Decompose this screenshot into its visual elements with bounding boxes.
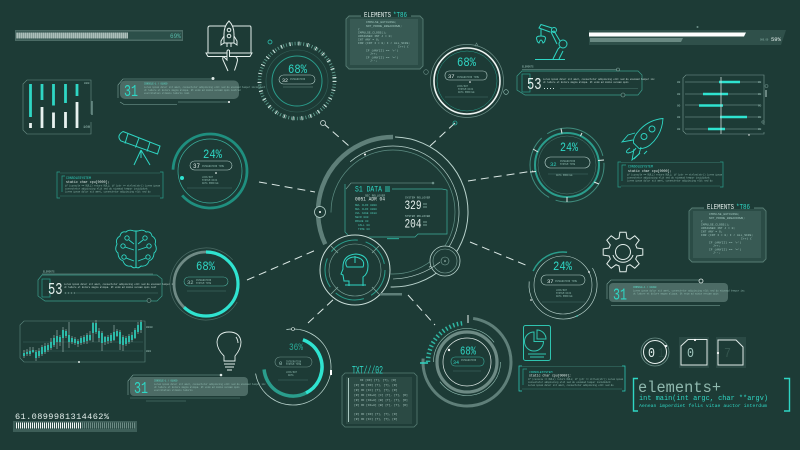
code panel: ELEMENTS top: NOT_PRONE_BREAKDOWN; bbox=[366, 25, 402, 28]
code panel: ELEMENTS right: INT ANY = 0; bbox=[701, 230, 723, 234]
code panel: right bbox=[618, 162, 723, 187]
code panel: ELEMENTS top: ELEMENTS bbox=[364, 12, 391, 20]
stat panel: 31 bottom: 31 bbox=[134, 379, 148, 398]
code panel: left: static char cpu[0000]; bbox=[66, 180, 110, 184]
code panel: ELEMENTS right: I++) { bbox=[741, 236, 752, 240]
code panel: TXT///02: [R] OF [IC] [T], [T], [R] bbox=[354, 388, 398, 392]
hub data panel: 0051 ADR 04 bbox=[355, 196, 386, 202]
hub inner bottom arc bbox=[380, 262, 440, 296]
bar chart panel: left vertical bars: 000 bbox=[84, 82, 90, 85]
progress bar: top right 59%: 000.00 bbox=[760, 38, 769, 42]
progress bar: top right 59%: 59% bbox=[771, 36, 782, 43]
stat panel: 53 right: 53 bbox=[527, 75, 542, 94]
stat panel: 31 bottom: ut labore et dolore magna aliqua. Ut enim ad minim veniam quis bbox=[154, 386, 240, 389]
code panel: TXT///02: [R] OF [IN+0] [B] [T], [T], [R] bbox=[354, 398, 408, 402]
bar chart panel: left vertical bars bbox=[23, 80, 92, 134]
gauge: 24% left: LOCK/OUT bbox=[202, 176, 214, 179]
gauge: 24% left: 37 bbox=[193, 163, 200, 170]
icon: document with pie chart bbox=[524, 326, 550, 360]
code panel: ELEMENTS top: UNSIGNED INT J = 0; bbox=[358, 35, 392, 38]
gauge: 68% left lower: 68% bbox=[196, 259, 215, 274]
gauge: 24% left: INTEGRATION TIME bbox=[202, 165, 225, 168]
counter: round 0: 0 bbox=[648, 347, 655, 362]
counter: square 0 bbox=[679, 337, 709, 368]
gauge: 24% right top: SYSTEM TIME bbox=[560, 163, 576, 166]
code panel: ELEMENTS top: J++; bbox=[370, 52, 377, 56]
code panel: TXT///02 bbox=[342, 366, 417, 427]
hub data panel: ROGUE 00 bbox=[355, 220, 369, 223]
hub data panel: 204 bbox=[404, 218, 422, 232]
gauge: 24% left: 24% bbox=[203, 147, 222, 162]
text block: elements+: elements+ bbox=[638, 379, 721, 397]
stat panel: 53 right bbox=[517, 66, 655, 97]
hub data panel: SYSTEM ROLLOVER bbox=[405, 215, 430, 218]
horizontal bar chart panel: 00 bbox=[677, 93, 681, 96]
text block: elements+: int main(int argc, char **argv) bbox=[639, 395, 768, 403]
hub data panel: 329 bbox=[404, 199, 422, 213]
code panel: bottom right: static char cpu[0000]; bbox=[529, 374, 571, 378]
code panel: bottom right: Lorem ipsum dolor sit amet, consectetur adipiscing elit sed do bbox=[528, 384, 614, 387]
stat panel: 53 left: Lorem ipsum dolor sit amet, consectetur adipiscing elit sed do eiusmod tempor inc bbox=[64, 283, 176, 286]
gauge: 68% bottom center: INTEGRATION bbox=[461, 359, 477, 362]
hub data panel: SEC ROLLOVER bbox=[365, 194, 385, 198]
gauge: 24% right lower: DATA PROFILE bbox=[556, 295, 573, 298]
gauge: 36%: 36% bbox=[289, 343, 303, 354]
gauge: 68% top ticks: 68% bbox=[288, 62, 307, 77]
bar chart panel: left vertical bars: 100 bbox=[83, 126, 91, 130]
gauge: 36% bbox=[249, 323, 337, 411]
code panel: ELEMENTS right: IF (ANY[I] == '+') bbox=[709, 240, 742, 244]
stat panel: 53 left: ut labore et dolore magna aliqua. Ut enim ad minim veniam quis nost bbox=[64, 286, 157, 289]
code panel: right: if (console == NULL) return NULL; if (ptr >= strlen(str)) Lorem ipsum bbox=[627, 174, 723, 176]
code panel: left: if (console == NULL) return NULL; if (ptr >= strlen(str)) Lorem ipsum bbox=[65, 184, 161, 188]
gauge: 68% top ticks: 32 bbox=[282, 78, 288, 84]
stat panel: 53 left: ELEMENTS bbox=[43, 270, 55, 274]
code panel: TXT///02: OF [IN] [T], [T], [R] bbox=[360, 378, 397, 382]
gauge: 68% left lower: 32 bbox=[187, 279, 194, 286]
code panel: TXT///02: [R] OF [IN] [T], [T], [R] bbox=[354, 383, 398, 387]
hub data panel: TIME 00 bbox=[358, 228, 370, 231]
code panel: ELEMENTS top: IMPULSE_CLOSE(); bbox=[358, 30, 387, 34]
hub data panel: SYSTEM ROLLOVER bbox=[405, 196, 430, 200]
gauge: 24% left: SYSTEM DATA bbox=[202, 179, 218, 182]
head icon circle bbox=[319, 234, 391, 306]
horizontal bar chart panel: 00 bbox=[758, 81, 762, 84]
hub data panel: CUL CAGE 0188 bbox=[355, 212, 377, 215]
code panel: ELEMENTS right: IMPULSE_CLOSE(); bbox=[701, 222, 730, 226]
horizontal bar chart panel: 00 bbox=[758, 104, 762, 108]
candlestick chart: 000 bbox=[146, 350, 151, 353]
code panel: ELEMENTS top: INT ANY = 0; bbox=[358, 38, 380, 42]
gauge: 24% right top bbox=[530, 128, 604, 202]
code panel: bottom right: CONSOLESYSTEM bbox=[529, 371, 553, 374]
text block: elements+ bbox=[634, 378, 790, 411]
code panel: ELEMENTS top: I++) { bbox=[398, 44, 409, 48]
gauge: 24% right top: DATA PROFILE bbox=[556, 174, 573, 177]
code panel: ELEMENTS right: J++; bbox=[713, 244, 720, 248]
gauge: 36%: SYSTEM TIME bbox=[286, 363, 302, 366]
code panel: ELEMENTS top: { bbox=[358, 27, 360, 31]
gauge: 68% top right: LOCK/OUT bbox=[457, 85, 469, 88]
code panel: TXT///02: TXT///02 bbox=[352, 366, 383, 378]
gauge: 36%: DATA bbox=[288, 374, 294, 377]
code panel: TXT///02: [R] OF [IN+0] [B] [T], [T], [R] bbox=[354, 403, 408, 407]
counter: square 0: 0 bbox=[687, 347, 694, 362]
gauge: 24% right top: INTEGRATION bbox=[560, 160, 576, 163]
horizontal bar chart panel: 00 bbox=[677, 128, 681, 131]
code panel: ELEMENTS top: *T86 bbox=[393, 12, 407, 20]
hub data panel: CALL 00 bbox=[358, 224, 370, 227]
gauge: 24% right top: 32 bbox=[550, 161, 557, 168]
code panel: ELEMENTS right: { bbox=[701, 219, 703, 223]
gauge: 24% right lower: INTEGRATION TIME bbox=[555, 280, 578, 283]
stat panel: 53 right: ELEMENTS bbox=[522, 66, 534, 68]
horizontal bar chart panel: 00 bbox=[758, 116, 762, 119]
icon: lightbulb bbox=[217, 332, 241, 370]
icon: brain bbox=[116, 230, 156, 268]
stat panel: 31 top left: CONSOLE-1 / 01000 bbox=[144, 82, 168, 86]
code panel: TXT///02: [R] OF [IN+0] [C] [T], [T], [R] bbox=[354, 393, 408, 397]
stat panel: 31 right: 31 bbox=[613, 286, 627, 304]
code panel: left: CONSOLESYSTEM bbox=[66, 176, 91, 180]
gauge: 24% right lower: SYSTEM DATA bbox=[556, 292, 572, 295]
stat panel: 31 right: CONSOLE-1 / 01000 bbox=[633, 286, 657, 289]
hub outer rings bbox=[293, 112, 493, 312]
hub data panel bbox=[345, 182, 447, 239]
code panel: ELEMENTS top: IF (ANY[I] == '=') bbox=[366, 56, 399, 60]
code panel: left: consectetur adipiscing elit sed do eiusmod tempor incididunt bbox=[65, 188, 148, 190]
code panel: ELEMENTS top: IF (ANY[I] == '+') bbox=[366, 48, 399, 52]
icon: gear bbox=[603, 232, 643, 272]
horizontal bar chart panel: 00 bbox=[758, 93, 762, 96]
code panel: ELEMENTS right: J--; bbox=[713, 252, 720, 254]
gauge: 68% bottom center: 34 bbox=[453, 360, 459, 366]
icon: rocket bbox=[622, 118, 663, 160]
code panel: ELEMENTS right bbox=[689, 200, 766, 262]
readout: percentage with hatched bar: 61.0899981314462% bbox=[15, 412, 110, 422]
stat panel: 53 left: 53 bbox=[48, 280, 62, 299]
stat panel: 31 bottom: CONSOLE-1 / 01000 bbox=[154, 380, 178, 382]
hub data panel: SECR 000 bbox=[355, 216, 369, 219]
code panel: ELEMENTS right: IF (ANY[I] == '=') bbox=[709, 248, 742, 252]
counter: round 0: 1 bbox=[658, 347, 664, 362]
readout: percentage with hatched bar bbox=[13, 412, 137, 432]
code panel: TXT///02: [R] OF [IN] [T], [T], [R] bbox=[354, 412, 398, 416]
central hub bbox=[293, 112, 493, 312]
gauge: 24% right lower: LOCK/OUT bbox=[556, 289, 568, 292]
counter: square 7 bbox=[716, 337, 746, 368]
gauge: 24% right lower: 37 bbox=[547, 278, 554, 285]
code panel: ELEMENTS right: IMPULSE_WATCHING; bbox=[709, 213, 740, 216]
progress bar: top right 59% bbox=[589, 26, 786, 45]
progress bar: top left 69%: 69% bbox=[170, 33, 181, 40]
text block: elements+: Aenean imperdiet felis vitae auctor interdum bbox=[639, 403, 767, 409]
code panel: ELEMENTS top: FOR (INT I = 0; I < ALL_SIZE; bbox=[358, 41, 410, 45]
code panel: bottom right bbox=[519, 366, 625, 391]
stat panel: 53 left bbox=[38, 270, 176, 302]
stat panel: 31 right: Lorem ipsum dolor sit amet, consectetur adipiscing elit sed do eiusmod tempor inc bbox=[633, 290, 745, 292]
icon: telescope bbox=[119, 132, 160, 165]
horizontal bar chart panel bbox=[677, 75, 768, 136]
gauge: 68% left lower bbox=[157, 235, 255, 333]
candlestick chart bbox=[20, 320, 153, 363]
robot arm icon bbox=[535, 24, 567, 60]
code panel: left bbox=[57, 172, 163, 198]
code panel: ELEMENTS top: J--; bbox=[370, 60, 377, 62]
horizontal bar chart panel: 00 bbox=[758, 128, 762, 131]
gauge: 68% top ticks: INTEGRATION bbox=[290, 78, 306, 81]
node: left bbox=[314, 206, 326, 218]
stat panel: 31 top left: 31 bbox=[124, 82, 138, 101]
stat panel: 31 bottom bbox=[128, 374, 266, 401]
stat panel: 31 right bbox=[607, 279, 745, 306]
node: small target bbox=[430, 246, 460, 276]
connector dashes bbox=[247, 123, 533, 325]
candlestick chart: 0000 bbox=[146, 326, 153, 329]
counter: round 0 bbox=[641, 338, 669, 366]
gauge: 68% left lower: SYSTEM TIME bbox=[196, 282, 212, 285]
hub data panel: NUL CLRF 0000 bbox=[355, 208, 377, 211]
gauge: 24% left bbox=[172, 133, 248, 209]
horizontal bar chart panel: 00 bbox=[677, 81, 681, 84]
gauge: 24% left: DATA PROFILE bbox=[202, 182, 219, 185]
gauge: 36%: INTEGRATION bbox=[286, 360, 302, 364]
horizontal bar chart panel: 00 bbox=[677, 104, 681, 108]
horizontal bar chart panel: 00 bbox=[677, 116, 681, 119]
stat panel: 53 right: Lorem ipsum dolor sit amet, consectetur adipiscing elit sed do eiusmod tempor inc bbox=[543, 78, 655, 81]
stat panel: 31 top left: ut labore et dolore magna aliqua. Ut enim ad minim veniam quis nostrud bbox=[144, 89, 241, 92]
gauge: 68% left lower: INTEGRATION bbox=[196, 279, 212, 282]
gauge: 68% bottom center bbox=[417, 312, 517, 412]
gauge: 36%: LOCK/OUT bbox=[286, 371, 298, 374]
code panel: right: Lorem ipsum dolor sit amet, consectetur adipiscing elit sed do bbox=[627, 180, 713, 182]
stat panel: 31 right: ut labore et dolore magna aliqua. Ut enim ad minim veniam quis bbox=[633, 292, 719, 296]
gauge: 24% right lower bbox=[517, 239, 609, 331]
gauge: 68% top right bbox=[424, 43, 508, 125]
hub data panel: S1 DATA bbox=[355, 184, 383, 194]
gauge: 68% top right: 37 bbox=[448, 73, 455, 80]
stat panel: 53 right: ut labore et dolore magna aliqua. Ut enim ad minim veniam quis bbox=[543, 81, 629, 84]
code panel: ELEMENTS top bbox=[346, 8, 423, 69]
code panel: right: static char cpu[0000]; bbox=[628, 169, 672, 173]
gauge: 68% top right: 68% bbox=[457, 55, 476, 70]
gauge: 24% right lower: 24% bbox=[553, 259, 572, 274]
code panel: ELEMENTS right: NOT_PRONE_BREAKDOWN; bbox=[709, 217, 745, 220]
gauge: 68% top right: DATA PROFILE bbox=[458, 91, 475, 94]
gauge: 24% right top: 24% bbox=[560, 140, 578, 155]
code panel: ELEMENTS right: *T86 bbox=[736, 204, 750, 212]
gauge: 68% bottom center: 68% bbox=[460, 346, 476, 358]
stat panel: 31 top left: Lorem ipsum dolor sit amet, consectetur adipiscing elit sed do eiusmod tempor incididunt bbox=[144, 86, 266, 89]
gauge: 36%: 0 bbox=[279, 360, 282, 367]
code panel: ELEMENTS right: FOR (INT I = 0; I < ALL_SIZE; bbox=[701, 233, 753, 237]
gauge: 68% top ticks bbox=[260, 40, 334, 126]
stat panel: 31 bottom: Lorem ipsum dolor sit amet, consectetur adipiscing elit sed do eiusmod tempor inc bbox=[154, 383, 266, 386]
code panel: ELEMENTS right: UNSIGNED INT J = 0; bbox=[701, 227, 735, 230]
code panel: ELEMENTS top: IMPULSE_WATCHING; bbox=[366, 21, 397, 24]
code panel: bottom right: if (console == NULL) return NULL; if (ptr >= strlen(str)) Lorem ipsum bbox=[528, 378, 624, 381]
gauge: 68% top right: INTEGRATION TIME bbox=[457, 76, 480, 79]
code panel: right: consectetur adipiscing elit sed do eiusmod tempor incididunt bbox=[627, 176, 710, 180]
counter: square 7: 7 bbox=[724, 347, 731, 362]
stat panel: 31 top left: exercitation ullamco laboris nisi bbox=[144, 92, 190, 95]
code panel: left: Lorem ipsum dolor sit amet, consectetur adipiscing elit sed do bbox=[65, 190, 151, 194]
code panel: bottom right: consectetur adipiscing elit sed do eiusmod tempor incididunt bbox=[528, 381, 611, 384]
progress bar: top left 69% bbox=[15, 30, 183, 41]
gauge: 68% top right: SYSTEM DATA bbox=[458, 88, 474, 91]
code panel: ELEMENTS right: ELEMENTS bbox=[707, 204, 734, 212]
stat panel: 31 top left bbox=[118, 77, 266, 104]
icon: laptop with rocket bbox=[206, 21, 252, 71]
stat panel: 31 bottom: exercitation ullamco laboris bbox=[154, 389, 193, 392]
hub data panel: NUL CLRF 0000 bbox=[355, 204, 377, 207]
code panel: TXT///02: [R] OF [IC] [T], [T], [R] bbox=[354, 417, 398, 421]
code panel: right: CONSOLESYSTEM bbox=[628, 164, 653, 168]
